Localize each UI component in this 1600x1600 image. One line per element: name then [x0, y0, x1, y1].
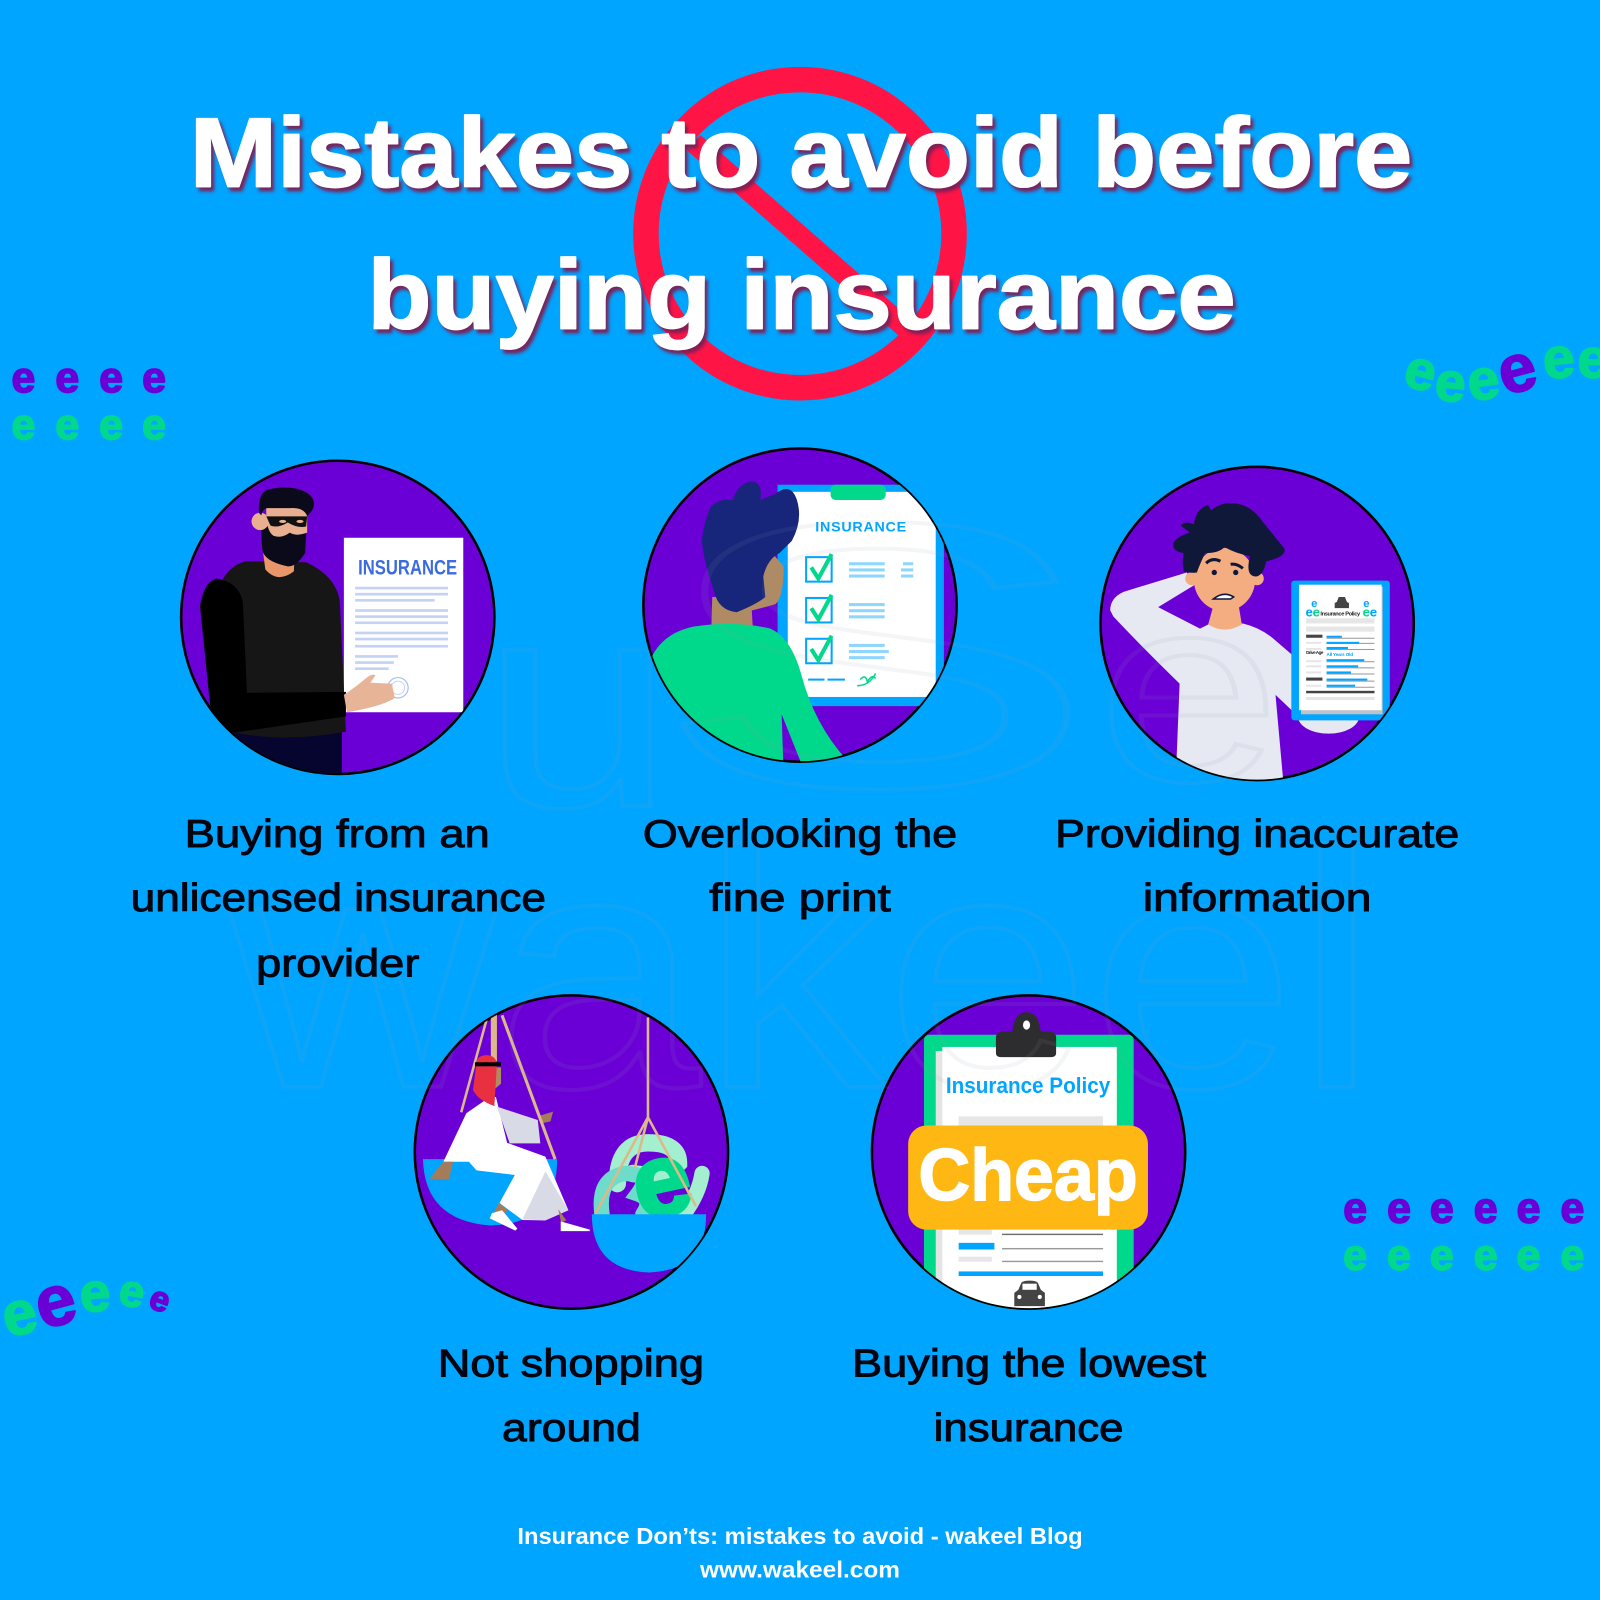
decoration: e pattern bottom right: e	[1343, 1231, 1367, 1279]
caption: unlicensed provider: Buying from an	[185, 813, 490, 856]
footer source: www.wakeel.com	[699, 1557, 900, 1583]
icon: prohibition sign	[646, 80, 954, 388]
decoration: e pattern bottom right: e	[1430, 1184, 1454, 1232]
caption: not shopping around: Not shopping	[438, 1343, 704, 1386]
decoration: e wave bottom left: e	[116, 1264, 149, 1318]
caption: not shopping around	[438, 1343, 704, 1450]
caption: lowest insurance: Buying the lowest	[852, 1343, 1206, 1386]
insurance policy clipboard: e	[1311, 598, 1317, 610]
arab man on swing	[430, 1015, 590, 1231]
decoration: e wave bottom left: e	[144, 1279, 175, 1321]
decoration: e pattern top left: e	[99, 354, 123, 402]
decoration: e wave top right	[1398, 325, 1600, 414]
thief figure	[200, 487, 395, 781]
panel: buying the lowest insurance illustration	[872, 995, 1185, 1327]
decoration: e pattern top left	[12, 354, 166, 449]
decoration: e wave bottom left	[0, 1258, 175, 1350]
insurance policy clipboard: Drive Age	[1306, 650, 1324, 655]
decoration: e pattern top left: e	[55, 354, 79, 402]
decoration: e pattern top left: e	[99, 401, 123, 449]
background watermark: wakeel	[224, 783, 1378, 1159]
confused man	[1110, 503, 1359, 786]
policy clipboard: Insurance Policy	[946, 1073, 1111, 1098]
caption: inaccurate information: information	[1143, 877, 1371, 920]
decoration: e pattern top left: e	[12, 354, 35, 402]
panel: not shopping around illustration	[415, 995, 728, 1309]
caption: lowest insurance: insurance	[934, 1407, 1123, 1450]
decoration: e pattern top left: e	[12, 401, 35, 449]
title	[190, 98, 1412, 350]
caption: fine print: Overlooking the	[643, 813, 957, 856]
e pile: e	[621, 1118, 701, 1242]
background watermark	[224, 445, 1378, 1159]
policy clipboard	[924, 1012, 1134, 1327]
decoration: e pattern bottom right: e	[1517, 1231, 1540, 1279]
left scale bowl	[423, 1159, 557, 1226]
decoration: e wave top right: e	[1489, 328, 1544, 410]
cheap badge: Cheap	[918, 1133, 1138, 1216]
decoration: e wave bottom left: e	[25, 1258, 85, 1345]
decoration: e pattern top left: e	[55, 401, 79, 449]
checklist clipboard: INSURANCE	[815, 520, 906, 536]
decoration: e pattern bottom right: e	[1387, 1184, 1411, 1232]
decoration: e pattern bottom right: e	[1561, 1184, 1584, 1232]
decoration: e pattern top left: e	[142, 354, 166, 402]
background watermark: S	[653, 445, 1097, 867]
insurance policy clipboard: e	[1305, 604, 1313, 619]
decoration: e wave top right: e	[1540, 325, 1577, 392]
caption: inaccurate information: Providing inaccurate	[1055, 813, 1459, 856]
insurance policy clipboard: Insurance Policy	[1320, 611, 1361, 617]
decoration: e pattern bottom right: e	[1517, 1184, 1540, 1232]
decoration: e pattern bottom right: e	[1474, 1184, 1498, 1232]
decoration: e wave bottom left: e	[78, 1260, 112, 1324]
caption: fine print	[643, 813, 957, 920]
right scale bowl	[592, 1214, 706, 1272]
panel: fine print illustration	[643, 448, 957, 776]
panel: inaccurate information illustration	[1101, 467, 1414, 786]
footer source: Insurance Don’ts: mistakes to avoid - wakeel Blog	[517, 1523, 1083, 1549]
document	[344, 538, 463, 712]
decoration: e pattern bottom right: e	[1387, 1231, 1411, 1279]
panel: unlicensed provider illustration	[181, 461, 494, 781]
decoration: e pattern bottom right: e	[1474, 1231, 1498, 1279]
insurance policy clipboard: e	[1363, 598, 1369, 610]
e pile	[594, 1134, 710, 1214]
insurance policy clipboard: e	[1313, 604, 1320, 619]
title: buying insurance	[367, 240, 1236, 350]
caption: lowest insurance	[852, 1343, 1206, 1450]
checklist clipboard	[778, 485, 944, 706]
document: INSURANCE	[358, 555, 457, 579]
background watermark: u	[483, 538, 673, 869]
right scale ropes	[595, 1117, 696, 1214]
balance ropes	[461, 1010, 648, 1117]
caption: not shopping around: around	[502, 1407, 641, 1450]
decoration: e pattern bottom right: e	[1561, 1231, 1584, 1279]
insurance policy clipboard: e	[1363, 604, 1370, 619]
insurance policy clipboard: e	[1370, 604, 1377, 619]
insurance policy clipboard: All Years Old	[1327, 652, 1353, 657]
decoration: e wave top right: e	[1463, 346, 1503, 414]
background watermark: e	[1097, 542, 1281, 838]
insurance policy clipboard	[1291, 581, 1390, 720]
caption: unlicensed provider: unlicensed insurance	[131, 877, 546, 920]
decoration: e pattern top left: e	[142, 401, 166, 449]
caption: unlicensed provider	[131, 813, 546, 986]
footer source	[517, 1523, 1083, 1583]
caption: fine print: fine print	[709, 877, 891, 920]
caption: inaccurate information	[1055, 813, 1459, 920]
caption: unlicensed provider: provider	[256, 943, 419, 986]
title: Mistakes to avoid before	[190, 98, 1412, 208]
decoration: e pattern bottom right: e	[1430, 1231, 1454, 1279]
decoration: e wave top right: e	[1398, 337, 1444, 404]
decoration: e wave top right: e	[1433, 350, 1469, 414]
decoration: e pattern bottom right: e	[1343, 1184, 1367, 1232]
person from behind	[651, 482, 847, 776]
decoration: e pattern bottom right	[1343, 1184, 1584, 1279]
